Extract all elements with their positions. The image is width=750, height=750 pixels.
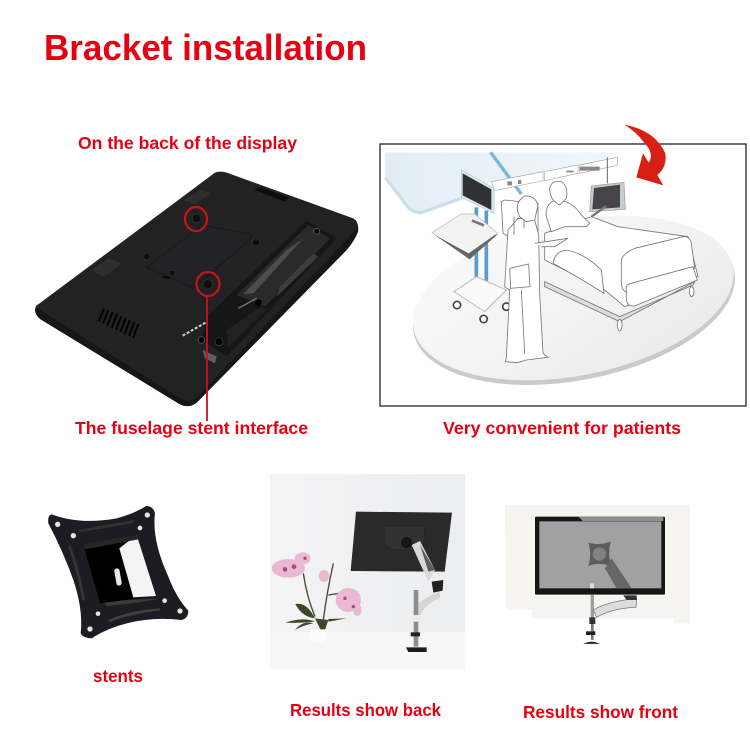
marker: upper screw [185, 207, 207, 231]
marker: lower screw [196, 272, 220, 296]
headwall rail [491, 157, 617, 191]
tablet body [35, 172, 358, 406]
lower vent [99, 308, 138, 338]
wall screen [590, 182, 625, 212]
top speaker grilles [183, 189, 212, 204]
red circle markers and leader line [185, 207, 220, 421]
label: results show back: Results show back [290, 700, 441, 720]
label: fuselage stent interface: The fuselage stent interface [75, 418, 308, 438]
label: results show front: Results show front [523, 702, 678, 722]
floor ellipse edge [399, 194, 749, 410]
floor ellipse [399, 191, 748, 405]
hospital illustration panel [380, 125, 749, 410]
doctor [505, 196, 568, 363]
arm and pole [590, 583, 594, 588]
monitor front [535, 517, 665, 595]
photo: results show front [505, 505, 690, 644]
curved red arrow [624, 125, 666, 185]
orchid [303, 563, 340, 620]
bracket on screen [588, 542, 611, 566]
ceiling band [385, 152, 618, 213]
label: stents: stents [93, 666, 143, 686]
vesa plate [147, 225, 252, 287]
desk [270, 632, 465, 669]
patient [546, 181, 606, 232]
photo: results show back [270, 474, 465, 669]
monitor arm [401, 537, 412, 548]
cart [461, 170, 494, 213]
monitor back [351, 512, 452, 572]
stent bracket photo [48, 506, 188, 638]
label: on the back of the display: On the back of the display [78, 133, 297, 153]
cable bay [202, 221, 337, 357]
bed [501, 200, 698, 331]
title: Bracket installation [44, 27, 367, 68]
leader line [206, 296, 208, 421]
screws [143, 214, 260, 289]
label: very convenient for patients: Very convenient for patients [443, 418, 681, 438]
tablet back photo [35, 172, 358, 406]
